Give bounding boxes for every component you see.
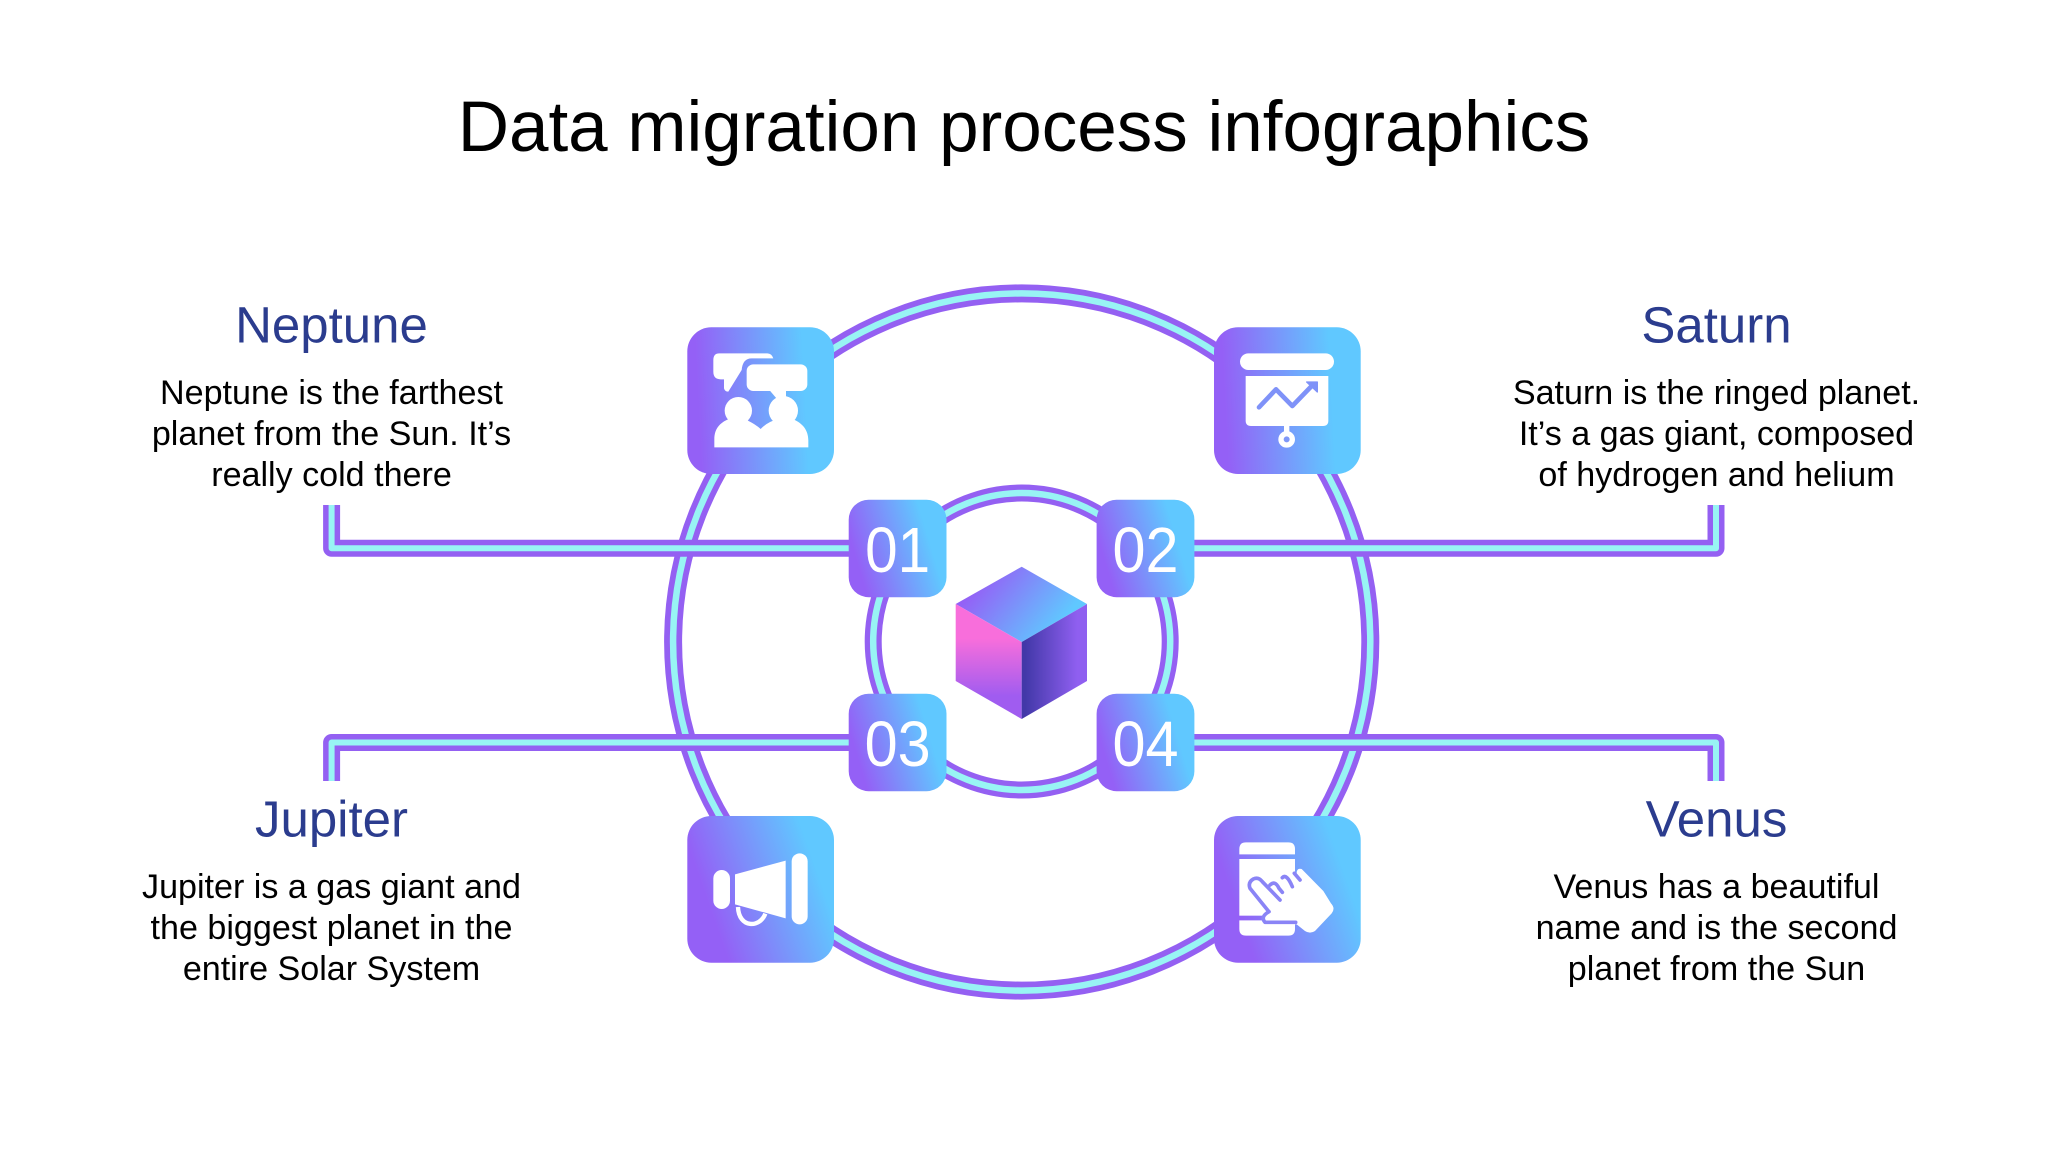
text block: Saturn: Saturn: [1641, 296, 1792, 354]
badge 03: 03: [865, 708, 931, 780]
text block: Neptune: Neptune: [235, 296, 428, 354]
connector: Jupiter to 03: [332, 742, 860, 781]
text block: Jupiter: [142, 790, 521, 988]
badge 04: [1097, 694, 1194, 791]
text block: Venus: name and is the second: [1536, 909, 1897, 947]
text block: Venus: Venus has a beautiful: [1554, 868, 1879, 906]
badge 01: 01: [865, 514, 930, 586]
text block: Jupiter: the biggest planet in the: [151, 909, 512, 947]
text block: Jupiter: Jupiter: [255, 790, 408, 848]
text block: Venus: [1536, 790, 1897, 988]
icon: hand tapping phone: [1214, 816, 1361, 963]
text block: Jupiter: Jupiter is a gas giant and: [142, 868, 521, 906]
text block: Saturn: [1513, 296, 1920, 494]
text block: Saturn: It’s a gas giant, composed: [1519, 415, 1914, 453]
text block: Neptune: really cold there: [211, 456, 452, 494]
badge 03: [849, 694, 946, 791]
badge 04: 04: [1112, 708, 1178, 780]
text block: Neptune: [152, 296, 511, 494]
connector: Neptune to 01: [332, 505, 860, 548]
icon: presentation board: [1214, 327, 1361, 474]
badge 02: 02: [1112, 514, 1178, 586]
title: Data migration process infographics: [458, 88, 1590, 167]
text block: Jupiter: entire Solar System: [183, 950, 480, 988]
outer ring: [673, 293, 1370, 991]
icon: megaphone: [687, 816, 834, 963]
connector: Saturn to 02: [1185, 505, 1716, 548]
badge 02: [1097, 500, 1194, 597]
icon: people talking: [687, 327, 834, 474]
connector: Venus to 04: [1185, 742, 1716, 781]
icon: central cube: [956, 567, 1087, 719]
text block: Venus: Venus: [1646, 790, 1787, 848]
text block: Saturn: of hydrogen and helium: [1538, 456, 1895, 494]
badge 01: [849, 500, 946, 597]
text block: Neptune: planet from the Sun. It’s: [152, 415, 511, 453]
text block: Saturn: Saturn is the ringed planet.: [1513, 374, 1920, 412]
text block: Venus: planet from the Sun: [1568, 950, 1865, 988]
text block: Neptune: Neptune is the farthest: [160, 374, 503, 412]
inner ring: [873, 493, 1170, 790]
